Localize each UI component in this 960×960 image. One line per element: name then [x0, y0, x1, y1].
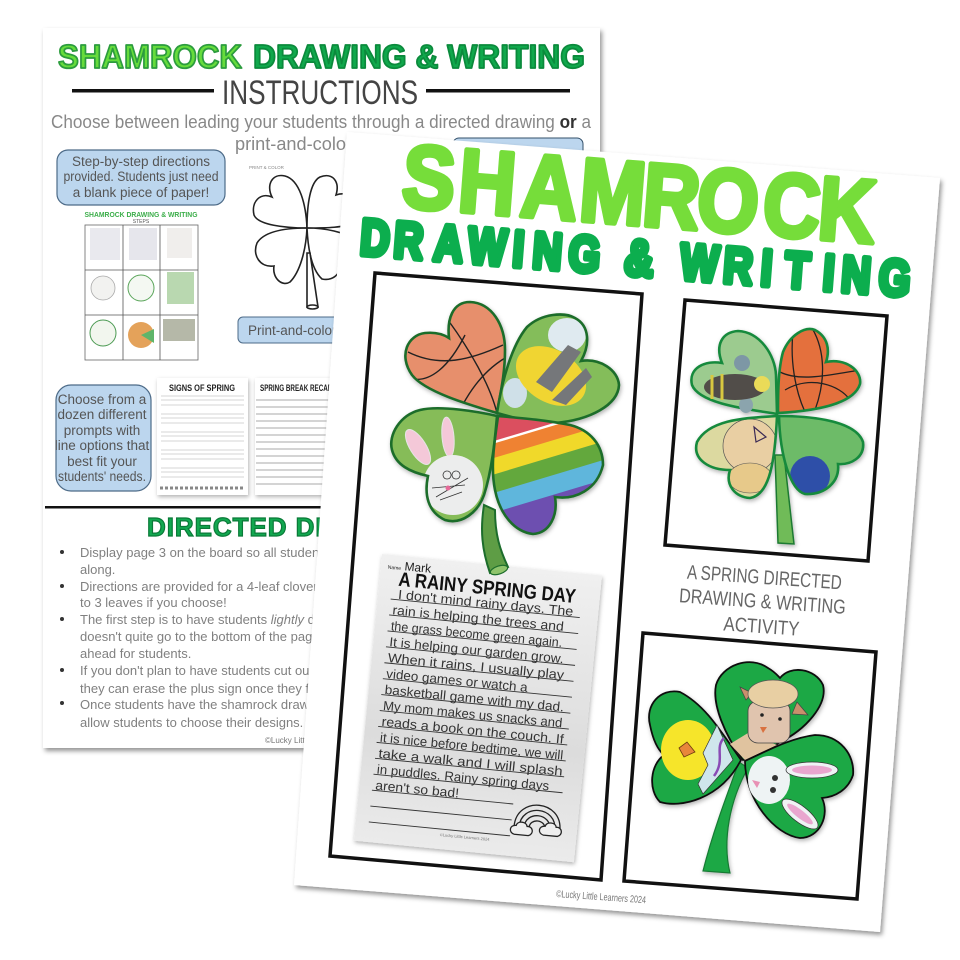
bullet list	[60, 545, 436, 730]
callout: prompts: students' needs.	[58, 469, 146, 484]
bullet list: allow students to choose their designs.	[80, 715, 303, 730]
essay handwriting	[375, 586, 579, 810]
stem	[775, 455, 794, 544]
callout: print and color	[238, 317, 384, 343]
mini steps sheet	[84, 212, 198, 360]
shamrock: four leaf second student	[691, 328, 863, 544]
bullet list: along.	[80, 562, 115, 577]
instructions heading with rules: INSTRUCTIONS	[222, 74, 418, 112]
essay handwriting: My mom makes us snacks and	[383, 698, 563, 730]
callout: prompts: best fit your	[67, 454, 137, 469]
shamrock: three leaf	[649, 662, 853, 873]
callout: step by step: Step-by-step directions	[72, 154, 210, 169]
essay handwriting: When it rains, I usually play	[387, 650, 565, 682]
lined writing sheet: signs of spring: SIGNS OF SPRING	[169, 383, 235, 393]
lined writing sheet: spring break recap	[255, 378, 355, 495]
bullet list: The first step is to have students lightly draw a plus sign that	[80, 612, 427, 627]
bullet list: Display page 3 on the board so all students can follow	[80, 545, 391, 560]
caption	[678, 562, 846, 641]
lined writing sheet: spring break recap: SPRING BREAK RECAP	[260, 383, 332, 393]
leaf: striped bee	[691, 331, 777, 414]
essay handwriting: basketball game with my dad.	[384, 682, 565, 714]
cover title: shamrock: SHAMROCK	[399, 125, 880, 262]
essay handwriting: it is nice before bedtime, we will	[379, 730, 564, 763]
caption: DRAWING & WRITING	[678, 585, 846, 619]
cover subtitle: drawing and writing: DRAWING & WRITING	[358, 208, 913, 308]
callout: step by step: a blank piece of paper!	[73, 185, 209, 200]
essay rainbow icon	[510, 803, 564, 839]
essay handwriting: aren't so bad!	[375, 777, 460, 801]
mini steps sheet: STEPS	[133, 219, 150, 225]
directed drawing heading: DIRECTED DRAWING	[147, 512, 427, 542]
bullet list: they can erase the plus sign once they finish drawing.	[80, 681, 389, 696]
intro text: print-and-color	[235, 134, 352, 154]
stem	[703, 762, 748, 873]
blue callout peeking behind front page	[453, 138, 583, 168]
lined writing sheet: signs of spring	[157, 378, 248, 495]
callout: step by step: provided. Students just need	[64, 169, 218, 184]
instructions heading with rules	[72, 74, 570, 112]
panel: front cover page	[294, 125, 940, 932]
mini steps sheet: SHAMROCK DRAWING & WRITING	[84, 212, 198, 219]
bullet list: Once students have the shamrock drawn, you can	[80, 697, 369, 712]
essay handwriting: rain is helping the trees and	[392, 602, 565, 634]
essay name: Name Mark	[387, 558, 433, 576]
bullet list: Directions are provided for a 4-leaf clover but can be changed	[80, 579, 436, 594]
divider	[45, 506, 600, 508]
cover footer: ©Lucky Little Learners 2024	[556, 889, 647, 906]
photo frame: four-leaf shamrock	[665, 300, 887, 561]
leaf: lamb	[715, 662, 824, 760]
essay handwriting: the grass become green again.	[390, 618, 563, 650]
essay small credit: ©Lucky Little Learners 2024	[440, 832, 491, 842]
panel: instructions page (back sheet)	[43, 28, 600, 748]
essay lines	[369, 599, 580, 841]
essay title: A RAINY SPRING DAY	[397, 569, 577, 608]
leaf: basketball second	[778, 328, 860, 413]
back page title: SHAMROCK	[58, 38, 242, 75]
essay handwriting: It is helping our garden grow.	[389, 634, 564, 666]
outline shamrock	[253, 176, 356, 309]
leaf: chick and egg	[649, 691, 741, 804]
callout: step by step	[57, 150, 225, 205]
leaf: green with blue circle	[779, 416, 863, 496]
callout: prompts: prompts with	[64, 423, 140, 438]
bullet list: If you don't plan to have students cut out their shamrocks,	[80, 663, 412, 678]
shamrock: four themed leaves	[391, 302, 625, 534]
bullet list: to 3 leaves if you choose!	[80, 595, 227, 610]
essay handwriting: take a walk and I will splash	[378, 746, 563, 779]
bullet list: ahead for students.	[80, 646, 191, 661]
print and color label: PRINT & COLOR	[249, 165, 285, 170]
leaf: bunny	[745, 735, 853, 838]
large shamrock stem	[482, 505, 509, 577]
essay handwriting: reads a book on the couch. If	[381, 714, 565, 747]
intro text: Choose between leading your students through a directed drawing or a	[51, 112, 592, 132]
essay handwriting: in puddles. Rainy spring days	[376, 762, 550, 793]
callout: prompts: dozen different	[57, 407, 147, 422]
bullet list: doesn't quite go to the bottom of the page to leave room	[80, 629, 402, 644]
student essay paper	[354, 554, 602, 862]
leaf: basketball	[405, 302, 505, 413]
leaf: bunny	[391, 408, 497, 521]
photo frame: large shamrock with essay	[330, 273, 642, 880]
caption: ACTIVITY	[723, 613, 800, 641]
back page title: DRAWING & WRITING	[253, 38, 585, 75]
photo frame: three-leaf shamrock	[624, 633, 876, 899]
intro text	[51, 112, 592, 154]
back page footer: ©Lucky Little Learners 2024	[265, 736, 365, 745]
essay handwriting: I don't mind rainy days. The	[397, 587, 574, 619]
back page title	[58, 38, 585, 75]
leaf: tan circle	[696, 416, 777, 498]
callout: prompts: Choose from a	[58, 392, 147, 407]
caption: A SPRING DIRECTED	[686, 562, 842, 594]
callout: prompts: line options that	[55, 438, 150, 453]
callout: prompts	[55, 385, 151, 491]
leaf: bee	[497, 315, 619, 423]
leaf: rainbow	[490, 414, 608, 540]
callout: print and color: Print-and-color options	[248, 323, 384, 338]
essay handwriting: video games or watch a	[386, 666, 529, 695]
